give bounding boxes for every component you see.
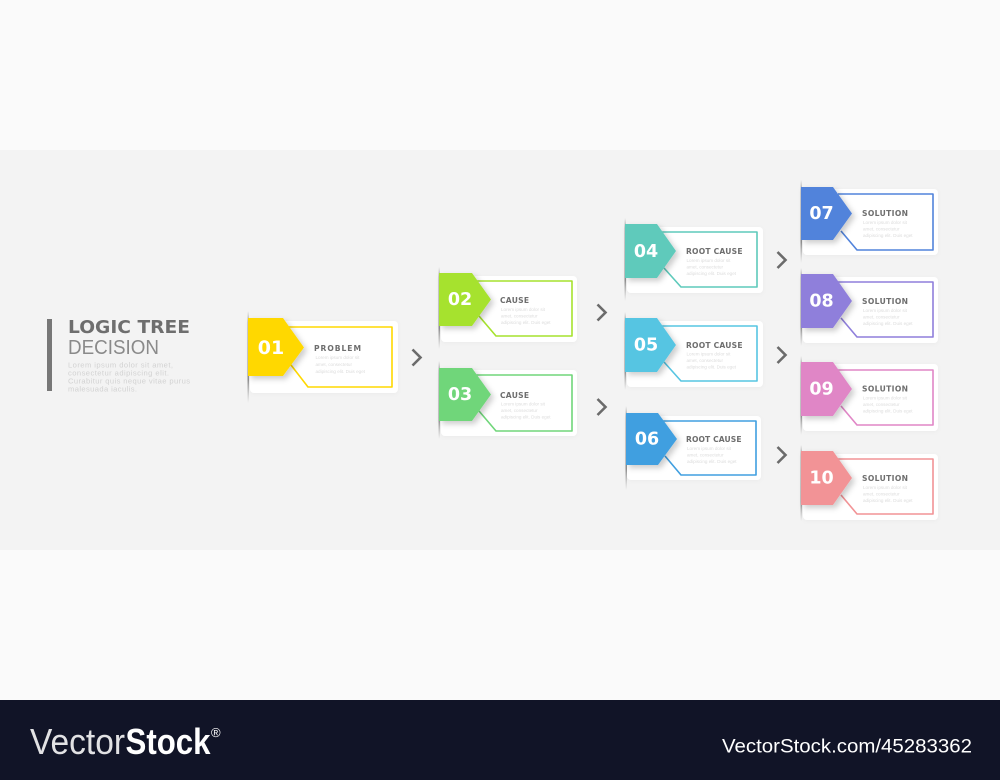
card 10: solution: Lorem ipsum dolor sit xyxy=(863,485,908,490)
card 09: solution xyxy=(800,356,938,435)
card 09: solution: Lorem ipsum dolor sit xyxy=(863,396,908,400)
footer bar xyxy=(0,700,1000,780)
card 09: solution: adipiscing elit. Duis eget xyxy=(863,408,913,414)
intro paragraph: Curabitur quis neque vitae purus xyxy=(68,376,190,386)
card 06: root cause: amet, consectetur xyxy=(687,452,724,458)
footer logo: Stock xyxy=(126,721,211,762)
card 07: solution: amet, consectetur xyxy=(863,226,900,232)
card 07: solution: 07 xyxy=(809,204,834,224)
card 01: problem: adipiscing elit. Duis eget xyxy=(316,369,366,374)
card 04: root cause: ROOT CAUSE xyxy=(686,247,742,256)
card 04: root cause: amet, consectetur xyxy=(686,264,723,270)
card 07: solution: adipiscing elit. Duis eget xyxy=(863,233,913,238)
intro paragraph: Lorem ipsum dolor sit amet, xyxy=(68,360,173,370)
card 08: solution xyxy=(800,268,938,346)
card 07: solution: Lorem ipsum dolor sit xyxy=(863,220,908,225)
card 06: root cause: adipiscing elit. Duis eget xyxy=(687,459,737,464)
card 04: root cause: Lorem ipsum dolor sit xyxy=(686,258,731,263)
card 10: solution xyxy=(800,445,938,521)
title block xyxy=(47,317,190,394)
card 04: root cause: adipiscing elit. Duis eget xyxy=(686,271,737,276)
card 09: solution: SOLUTION xyxy=(862,384,908,394)
card 05: root cause: amet, consectetur xyxy=(686,358,723,363)
card 08: solution: adipiscing elit. Duis eget xyxy=(863,321,913,326)
card 05: root cause: ROOT CAUSE xyxy=(686,341,742,350)
footer url: VectorStock.com/45283362 xyxy=(722,736,972,758)
card 04: root cause: 04 xyxy=(634,242,658,262)
card 07: solution: SOLUTION xyxy=(862,209,908,218)
card 05: root cause xyxy=(624,312,763,390)
card 05: root cause: Lorem ipsum dolor sit xyxy=(686,352,731,356)
card 02: cause: CAUSE xyxy=(500,296,529,305)
card 03: cause: amet, consectetur xyxy=(501,408,538,413)
card 01: problem: Lorem ipsum dolor sit xyxy=(316,355,360,360)
card 10: solution: amet, consectetur xyxy=(863,492,900,496)
card 06: root cause: ROOT CAUSE xyxy=(686,435,742,444)
card 05: root cause: adipiscing elit. Duis eget xyxy=(686,364,737,370)
card 08: solution: 08 xyxy=(809,292,834,312)
card 10: solution: adipiscing elit. Duis eget xyxy=(863,498,913,503)
card 08: solution: amet, consectetur xyxy=(863,314,900,320)
arrow 05 to solutions xyxy=(778,347,786,363)
card 05: root cause: 05 xyxy=(634,336,658,356)
card 03: cause: CAUSE xyxy=(500,391,529,400)
arrow 02 to root causes xyxy=(598,304,606,320)
card 06: root cause: 06 xyxy=(635,430,659,450)
title: logic tree: LOGIC TREE xyxy=(68,317,190,338)
arrow 01 to causes xyxy=(412,350,420,366)
card 01: problem xyxy=(248,311,398,403)
footer logo: Vector xyxy=(30,721,125,762)
card 10: solution: SOLUTION xyxy=(862,474,908,483)
card 02: cause: adipiscing elit. Duis eget xyxy=(501,320,551,325)
intro paragraph xyxy=(68,360,190,394)
card 03: cause: adipiscing elit. Duis eget xyxy=(501,414,551,420)
registered mark: ® xyxy=(211,725,221,740)
card 02: cause xyxy=(438,267,577,349)
card 07: solution xyxy=(800,180,938,263)
arrow 03 to root causes xyxy=(598,399,606,415)
arrow 04 to solutions xyxy=(778,252,786,268)
footer logo xyxy=(30,721,211,762)
arrow 06 to solutions xyxy=(778,447,786,463)
intro paragraph: consectetur adipiscing elit. xyxy=(68,368,169,378)
card 06: root cause: Lorem ipsum dolor sit xyxy=(687,446,732,451)
card 01: problem: amet, consectetur xyxy=(316,362,352,367)
card 03: cause: 03 xyxy=(448,385,472,405)
card 09: solution: 09 xyxy=(809,380,834,400)
intro paragraph: malesuada iaculis. xyxy=(68,384,137,394)
subtitle: decision: DECISION xyxy=(68,336,159,359)
card 02: cause: Lorem ipsum dolor sit xyxy=(501,307,546,312)
card 08: solution: SOLUTION xyxy=(862,297,908,306)
card 03: cause: Lorem ipsum dolor sit xyxy=(501,402,546,406)
card 01: problem: 01 xyxy=(258,337,284,359)
card 03: cause xyxy=(438,361,577,439)
card 02: cause: 02 xyxy=(448,290,472,310)
card 06: root cause xyxy=(626,406,761,490)
title accent bar xyxy=(47,319,52,391)
card 01: problem: PROBLEM xyxy=(314,344,361,353)
card 02: cause: amet, consectetur xyxy=(501,314,538,318)
card 09: solution: amet, consectetur xyxy=(863,402,900,407)
card 08: solution: Lorem ipsum dolor sit xyxy=(863,308,908,313)
card 04: root cause xyxy=(624,218,763,301)
card 10: solution: 10 xyxy=(809,468,834,488)
